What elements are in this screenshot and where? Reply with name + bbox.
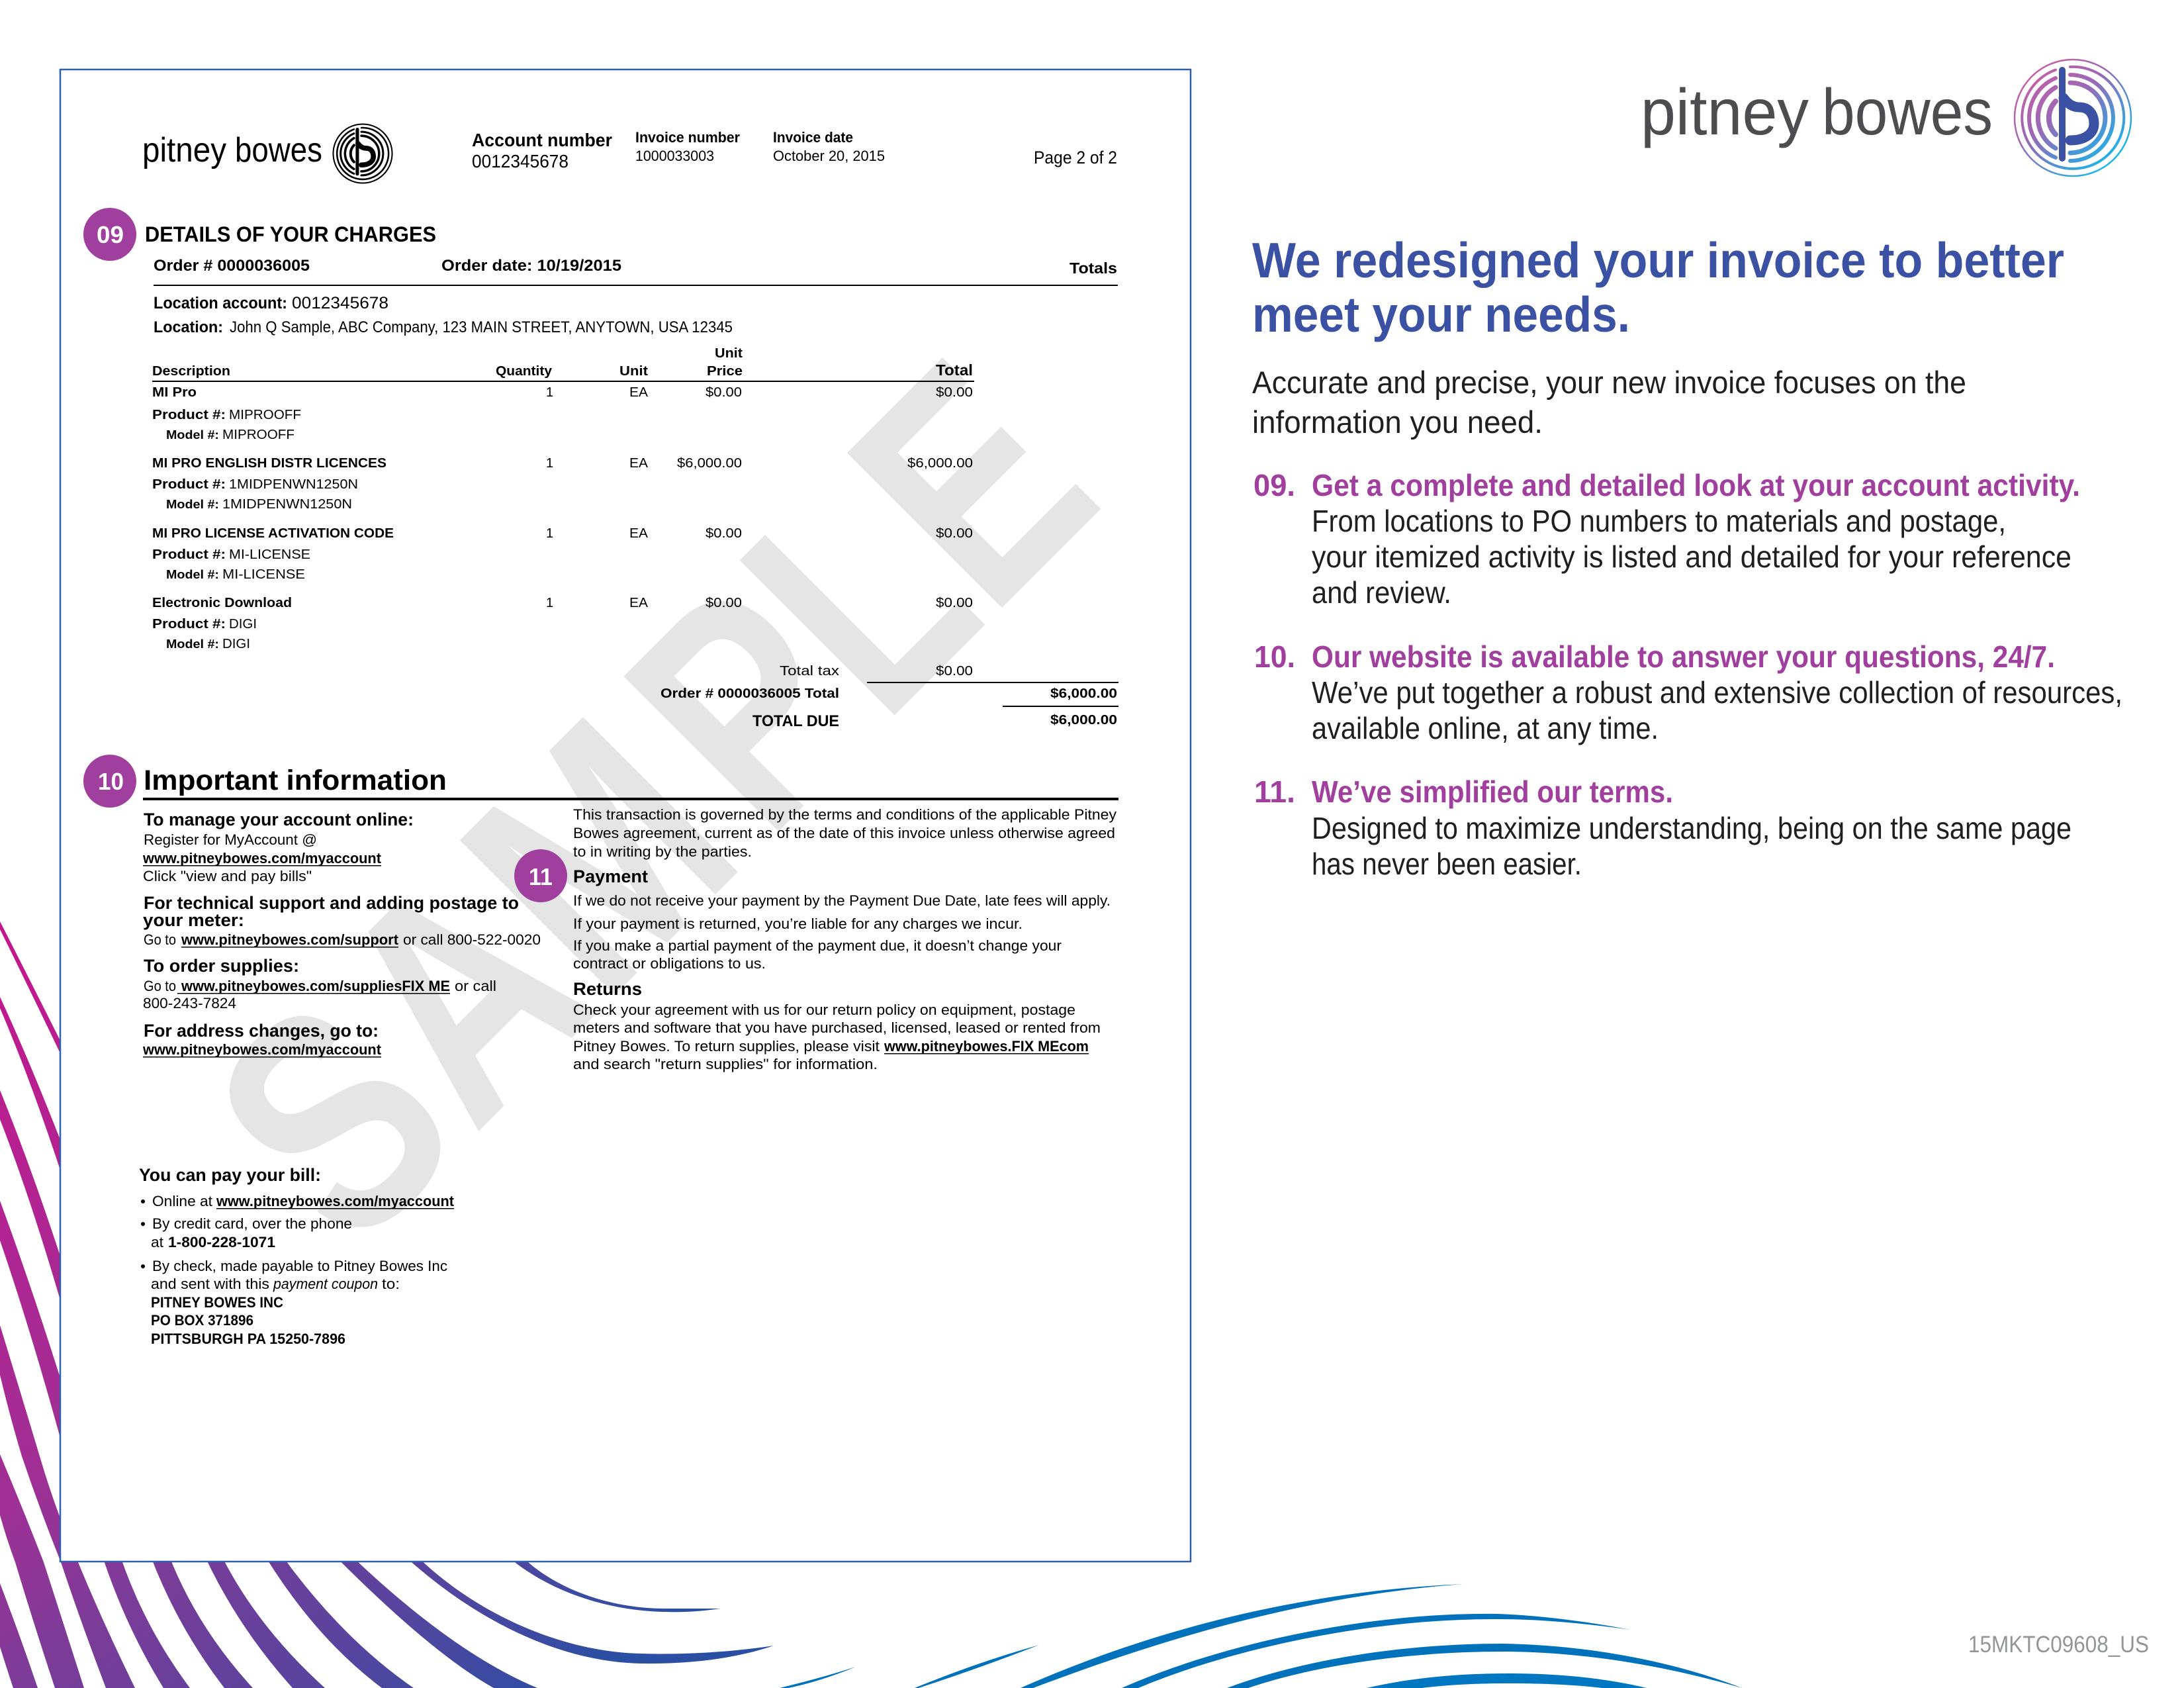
terms intro: Bowes agreement, current as of the date of this invoice unless otherwise agreed — [573, 825, 1115, 841]
logo wordmark: bowes — [235, 131, 322, 169]
totals block: $0.00 — [936, 664, 973, 679]
bullet: check: and sent with this — [151, 1276, 269, 1292]
pay your bill block: You can pay your bill: — [139, 1165, 321, 1185]
background waves: blue arcs — [780, 1584, 1742, 1688]
bullet: check — [141, 1258, 447, 1347]
account number: Account number — [472, 130, 612, 150]
row: MI Pro English Distr Licences: $6,000.00 — [677, 456, 742, 471]
payment terms: If you make a partial payment of the payment due, it doesn’t change your — [573, 937, 1062, 954]
invoice number — [635, 129, 740, 164]
row: Electronic Download: $0.00 — [936, 596, 973, 610]
Pitney Bowes logo — [1641, 60, 2131, 176]
table header: Price — [707, 364, 743, 379]
bullet: check: payment coupon — [273, 1276, 378, 1292]
row: Electronic Download: $0.00 — [705, 596, 742, 610]
returns terms: and search "return supplies" for information. — [573, 1056, 878, 1072]
returns terms: www.pitneybowes.FIX MEcom — [884, 1038, 1089, 1055]
background waves: magenta to blue bands — [0, 921, 774, 1688]
invoice number: 1000033003 — [635, 148, 714, 164]
bullet: credit card: at — [151, 1234, 163, 1250]
row: MI Pro: MIPROOFF — [229, 408, 301, 422]
manage account online: Register for MyAccount @ — [144, 831, 317, 848]
table header: Description — [152, 364, 230, 379]
bullet: check: to: — [382, 1276, 400, 1292]
account number: 0012345678 — [472, 151, 569, 171]
callout 09: and review. — [1312, 575, 1451, 610]
bullet: online: www.pitneybowes.com/myaccount — [216, 1193, 455, 1209]
address changes — [142, 1021, 382, 1058]
row: MI Pro License Activation Code — [152, 526, 973, 582]
callout 10: available online, at any time. — [1312, 711, 1659, 745]
table header: Unit — [715, 346, 743, 361]
address changes: For address changes, go to: — [144, 1021, 379, 1041]
badge 11 — [514, 849, 567, 902]
location details: Location account: — [154, 294, 287, 312]
order supplies: www.pitneybowes.com/suppliesFIX ME — [181, 978, 450, 994]
callout 09: your itemized activity is listed and detailed for your reference — [1312, 539, 2071, 574]
badge 09 — [83, 208, 136, 261]
callout 11 — [1254, 774, 2071, 881]
row: MI Pro License Activation Code: 1 — [546, 526, 553, 541]
badge 10: 10 — [98, 768, 124, 795]
returns terms: Returns — [573, 979, 642, 999]
order supplies: To order supplies: — [144, 956, 299, 976]
row: MI Pro License Activation Code: MI-LICENSE — [222, 567, 305, 582]
main heading: We redesigned your invoice to better — [1252, 232, 2064, 288]
row: MI Pro: EA — [629, 385, 649, 400]
logo symbol — [333, 124, 392, 183]
account help column — [142, 810, 541, 1058]
terms intro: This transaction is governed by the terms and conditions of the applicable Pitney — [573, 806, 1116, 823]
callout 10 — [1254, 639, 2122, 745]
location details: Location: — [154, 318, 223, 336]
row: MI Pro English Distr Licences: $6,000.00 — [907, 456, 973, 471]
row: Electronic Download: Model #: — [166, 637, 219, 651]
row: Electronic Download: DIGI — [222, 637, 250, 651]
manage account online: www.pitneybowes.com/myaccount — [142, 850, 382, 867]
manage account online: To manage your account online: — [144, 810, 414, 829]
callout 11: has never been easier. — [1312, 847, 1582, 881]
technical support: Go to — [144, 931, 176, 948]
row: MI Pro License Activation Code: Model #: — [166, 568, 219, 581]
invoice date: Invoice date — [773, 129, 853, 146]
invoice date: October 20, 2015 — [773, 148, 885, 164]
bullet: credit card: By credit card, over the phone — [152, 1215, 352, 1232]
table header: Total — [936, 361, 973, 379]
returns terms: meters and software that you have purchased, licensed, leased or rented from — [573, 1019, 1101, 1036]
row: MI Pro: $0.00 — [936, 385, 973, 400]
row: MI Pro English Distr Licences: EA — [629, 456, 649, 471]
payment terms: Payment — [573, 867, 648, 886]
table header: Quantity — [496, 364, 553, 379]
badge 11: 11 — [529, 863, 553, 890]
row: MI Pro License Activation Code: MI PRO LICENSE ACTIVATION CODE — [152, 526, 394, 541]
document code: 15MKTC09608_US — [1968, 1632, 2149, 1658]
callout 09 — [1253, 468, 2080, 610]
payment terms: If we do not receive your payment by the Payment Due Date, late fees will apply. — [573, 892, 1111, 909]
row: Electronic Download: 1 — [546, 596, 553, 610]
invoice panel — [60, 70, 1191, 1562]
row: MI Pro: MI Pro — [152, 385, 197, 400]
row: Electronic Download: Product #: — [152, 617, 226, 632]
row: MI Pro: Product #: — [152, 408, 226, 422]
logo wordmark: bowes — [1822, 75, 1993, 148]
bullet: online: Online at — [152, 1193, 212, 1209]
logo wordmark — [1641, 75, 1993, 148]
totals block: Total tax — [780, 664, 839, 679]
order supplies: or call — [455, 978, 496, 994]
row: MI Pro English Distr Licences: 1MIDPENWN1250N — [229, 477, 358, 492]
SAMPLE watermark: SAMPLE — [149, 298, 1156, 1305]
logo symbol — [2015, 60, 2131, 176]
payment terms — [573, 867, 1111, 972]
badge 09: 09 — [97, 221, 124, 248]
technical support — [143, 893, 541, 948]
account number — [472, 130, 612, 171]
callout 09: From locations to PO numbers to materials and postage, — [1312, 504, 2006, 538]
badge 10 — [83, 755, 136, 808]
location details — [154, 294, 733, 336]
row: MI Pro: MIPROOFF — [222, 428, 295, 442]
intro paragraph — [1252, 365, 1966, 440]
panel frame — [60, 70, 1191, 1562]
invoice date — [773, 129, 885, 164]
logo wordmark: pitney — [142, 131, 226, 169]
row: MI Pro: $0.00 — [705, 385, 742, 400]
intro paragraph: information you need. — [1252, 404, 1543, 440]
callout 09: Get a complete and detailed look at your account activity. — [1312, 468, 2080, 502]
row: Electronic Download: DIGI — [229, 617, 257, 632]
bullet: check: PO BOX 371896 — [151, 1312, 253, 1329]
logo wordmark: pitney — [1641, 75, 1809, 148]
main heading: meet your needs. — [1252, 287, 1630, 342]
row: MI Pro: 1 — [546, 385, 553, 400]
payment terms: If your payment is returned, you’re liable for any charges we incur. — [573, 915, 1023, 932]
location details: John Q Sample, ABC Company, 123 MAIN STREET, ANYTOWN, USA 12345 — [230, 318, 733, 336]
order header row: Order date: 10/19/2015 — [441, 257, 621, 275]
row: Electronic Download: Electronic Download — [152, 596, 292, 610]
main heading — [1252, 232, 2064, 342]
invoice header logo — [142, 124, 392, 183]
row: MI Pro English Distr Licences — [152, 456, 973, 512]
pay your bill block — [139, 1165, 455, 1347]
terms column — [573, 806, 1116, 1072]
totals block: TOTAL DUE — [752, 712, 839, 730]
invoice number: Invoice number — [635, 129, 740, 146]
row: MI Pro — [152, 385, 973, 442]
location details: 0012345678 — [292, 294, 388, 312]
technical support: For technical support and adding postage to — [144, 893, 519, 913]
charges table — [152, 346, 1118, 730]
callout 11: Designed to maximize understanding, being on the same page — [1312, 811, 2071, 845]
order supplies — [143, 956, 496, 1011]
table header: Unit — [619, 364, 648, 379]
callout 11: 11. — [1254, 774, 1295, 809]
totals block: $6,000.00 — [1050, 686, 1117, 701]
terms intro — [573, 806, 1116, 860]
row: MI Pro License Activation Code: $0.00 — [705, 526, 742, 541]
intro paragraph: Accurate and precise, your new invoice focuses on the — [1252, 365, 1966, 400]
row: MI Pro License Activation Code: Product #: — [152, 547, 226, 562]
order header row: Totals — [1069, 259, 1117, 277]
totals block: Order # 0000036005 Total — [660, 686, 839, 701]
heading: important information: Important information — [144, 765, 447, 796]
callout 10: 10. — [1254, 639, 1295, 674]
order header row — [154, 257, 1118, 286]
technical support: your meter: — [143, 910, 244, 930]
bullet: check: PITNEY BOWES INC — [151, 1294, 283, 1311]
table header — [152, 346, 974, 382]
row: MI Pro English Distr Licences: MI PRO ENGLISH DISTR LICENCES — [152, 456, 387, 471]
heading: important information — [143, 765, 1118, 800]
row: MI Pro English Distr Licences: Model #: — [166, 498, 219, 511]
manage account online — [142, 810, 414, 884]
order supplies: Go to — [144, 978, 176, 994]
heading: details of your charges: DETAILS OF YOUR CHARGES — [145, 222, 436, 246]
technical support: www.pitneybowes.com/support — [181, 931, 399, 948]
order header row: Order # 0000036005 — [154, 257, 310, 275]
manage account online: Click "view and pay bills" — [143, 868, 312, 884]
payment terms: contract or obligations to us. — [573, 955, 766, 972]
returns terms: Check your agreement with us for our return policy on equipment, postage — [573, 1002, 1075, 1018]
order supplies: 800-243-7824 — [143, 995, 236, 1011]
row: MI Pro License Activation Code: $0.00 — [936, 526, 973, 541]
row: Electronic Download — [152, 596, 973, 651]
row: MI Pro: Model #: — [166, 428, 219, 442]
row: MI Pro English Distr Licences: 1MIDPENWN1250N — [222, 497, 352, 512]
returns terms: Pitney Bowes. To return supplies, please visit — [573, 1038, 880, 1055]
logo wordmark — [142, 131, 322, 169]
row: Electronic Download: EA — [629, 596, 649, 610]
row: MI Pro License Activation Code: MI-LICENSE — [229, 547, 310, 562]
row: MI Pro English Distr Licences: 1 — [546, 456, 553, 471]
page number: Page 2 of 2 — [1034, 148, 1117, 167]
bullet: credit card: 1-800-228-1071 — [168, 1234, 275, 1250]
totals block: $6,000.00 — [1050, 713, 1117, 727]
bullet: check: PITTSBURGH PA 15250-7896 — [151, 1331, 345, 1347]
address changes: www.pitneybowes.com/myaccount — [142, 1041, 382, 1058]
callout 11: We’ve simplified our terms. — [1312, 774, 1673, 809]
bullet: credit card — [141, 1215, 352, 1250]
callout 10: Our website is available to answer your questions, 24/7. — [1312, 639, 2055, 674]
callout 09: 09. — [1253, 468, 1295, 502]
callout 10: We’ve put together a robust and extensive collection of resources, — [1312, 675, 2122, 710]
bullet: check: By check, made payable to Pitney Bowes Inc — [152, 1258, 447, 1274]
row: MI Pro License Activation Code: EA — [629, 526, 649, 541]
technical support: or call 800-522-0020 — [403, 931, 541, 948]
row: MI Pro English Distr Licences: Product #: — [152, 477, 226, 492]
terms intro: to in writing by the parties. — [573, 843, 752, 860]
totals block — [660, 664, 1118, 730]
returns terms — [573, 979, 1101, 1072]
